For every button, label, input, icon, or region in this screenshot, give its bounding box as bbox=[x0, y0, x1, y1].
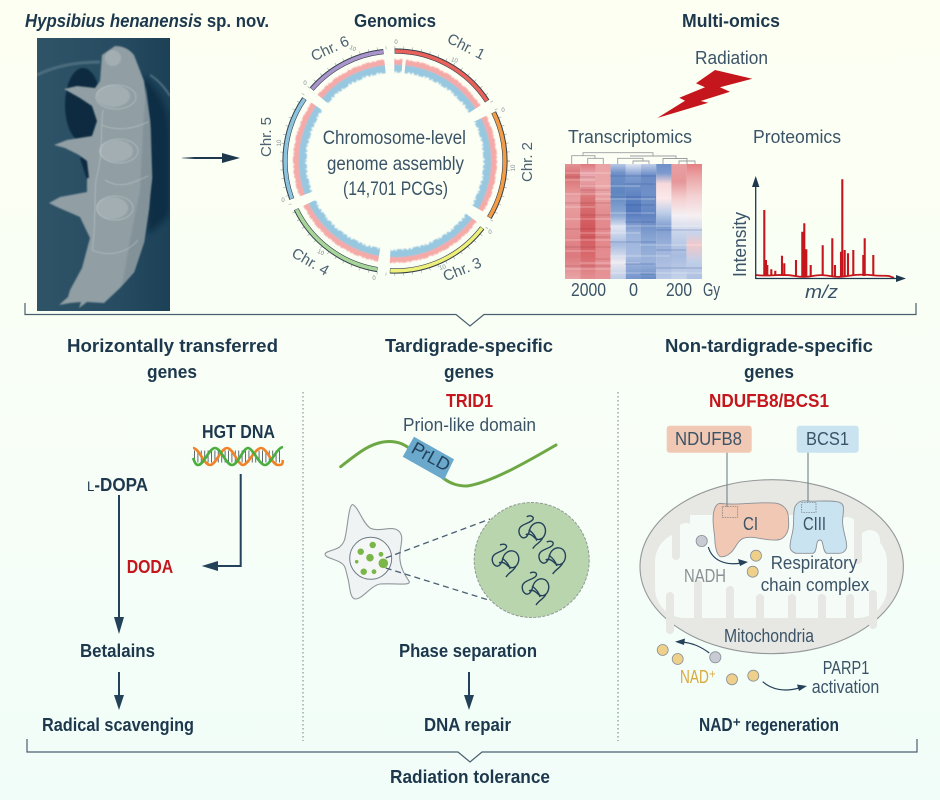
labels: chromosomes: 0 bbox=[281, 198, 285, 204]
label: PARP1 activation: activation bbox=[812, 677, 879, 697]
diagram: protein with PrLD: PrLD bbox=[408, 438, 454, 475]
callout: BCS1 bbox=[797, 426, 859, 453]
label: NAD+: NAD⁺ bbox=[680, 667, 716, 687]
heading: tardigrade-specific genes: Tardigrade-specific bbox=[385, 336, 553, 356]
icon: cell with condensates bbox=[325, 504, 409, 599]
labels: dose axis bbox=[571, 280, 720, 300]
labels: chromosomes: 0 bbox=[488, 230, 492, 236]
label: NAD+ regeneration: NAD⁺ regeneration bbox=[699, 715, 839, 735]
diagram: mitochondrion bbox=[640, 480, 903, 654]
labels: chromosomes: 10 bbox=[277, 139, 283, 146]
heading: multi-omics: Multi-omics bbox=[682, 11, 780, 31]
arrow: photo to genome bbox=[182, 153, 240, 163]
label: transcriptomics: Transcriptomics bbox=[568, 127, 692, 147]
text: chromosome-level genome assembly: (14,701 PCGs) bbox=[343, 179, 448, 200]
label: HGT DNA: HGT DNA bbox=[202, 422, 275, 442]
label: DODA: DODA bbox=[127, 557, 173, 577]
labels: chromosomes: Chr. 6 bbox=[308, 33, 352, 65]
label: TRID1: TRID1 bbox=[446, 391, 493, 411]
arrow: betalains to radical scavenging bbox=[114, 672, 124, 710]
bracket: top bbox=[25, 303, 916, 326]
heading: non-tardigrade-specific genes: Non-tardigrade-specific bbox=[665, 336, 873, 356]
labels: chromosomes: 10 bbox=[511, 164, 517, 171]
heading: tardigrade-specific genes bbox=[385, 336, 553, 382]
chart: expression heat map bbox=[565, 164, 702, 279]
label: phase separation: Phase separation bbox=[399, 641, 537, 661]
label: proteomics: Proteomics bbox=[753, 127, 841, 147]
conclusion: radiation tolerance: Radiation tolerance bbox=[390, 767, 550, 787]
arrow: HGT DNA to DODA bbox=[202, 474, 241, 571]
complex III: CIII bbox=[803, 514, 826, 534]
labels: chromosomes: 10 bbox=[439, 264, 447, 272]
labels: chromosomes: Chr. 3 bbox=[441, 254, 484, 285]
label: m/z axis: m/z bbox=[805, 282, 838, 302]
label: NADH: NADH bbox=[684, 566, 726, 586]
label: respiratory chain complex: chain complex bbox=[761, 575, 869, 595]
heading: non-tardigrade-specific genes: genes bbox=[744, 362, 794, 382]
panel: genomics bbox=[260, 14, 532, 280]
labels: chromosomes: 0 bbox=[394, 40, 398, 46]
chart: circular genome tracks bbox=[294, 60, 496, 262]
chart: chromosome bars bbox=[240, 6, 550, 316]
arrow: to PARP1 activation bbox=[763, 682, 807, 691]
icon: NAD+ molecules bbox=[657, 638, 759, 685]
labels: chromosomes: Chr. 5 bbox=[258, 117, 275, 157]
label: radiation: Radiation bbox=[695, 48, 768, 68]
text: chromosome-level genome assembly: genome assembly bbox=[327, 154, 464, 175]
label: L-DOPA: L-DOPA bbox=[87, 475, 148, 495]
icon: DNA helix bbox=[193, 447, 283, 465]
callout: NDUFB8 bbox=[667, 426, 752, 453]
heading: horizontally transferred genes: Horizontally transferred bbox=[67, 336, 278, 356]
chart: dendrogram bbox=[572, 153, 695, 164]
icon: lightning bolt bbox=[657, 70, 752, 118]
lines: zoom to condensate bbox=[386, 519, 491, 601]
heading: genomics: Genomics bbox=[354, 11, 436, 31]
panel: tardigrade-specific genes bbox=[325, 336, 589, 735]
text: chromosome-level genome assembly bbox=[323, 128, 466, 200]
label: intensity axis: Intensity bbox=[730, 212, 750, 277]
label: radical scavenging: Radical scavenging bbox=[42, 715, 194, 735]
complex III bbox=[790, 501, 847, 553]
panel: non-tardigrade-specific genes bbox=[640, 336, 903, 735]
arrow: phase separation to DNA repair bbox=[464, 672, 474, 710]
label: PARP1 activation bbox=[812, 658, 879, 697]
chart: mass spectrum bbox=[752, 176, 906, 282]
diagram: protein with PrLD bbox=[341, 437, 556, 486]
label: mitochondria: Mitochondria bbox=[724, 626, 815, 646]
heading: tardigrade-specific genes: genes bbox=[444, 362, 494, 382]
labels: dose axis: 0 bbox=[629, 280, 638, 300]
labels: chromosomes: 10 bbox=[316, 249, 325, 258]
heading: non-tardigrade-specific genes bbox=[665, 336, 873, 382]
labels: dose axis: 200 bbox=[666, 280, 692, 300]
complex I bbox=[713, 503, 789, 557]
panel: multi-omics bbox=[565, 11, 906, 302]
label: respiratory chain complex: Respiratory bbox=[771, 553, 857, 573]
labels: dose axis: Gy bbox=[703, 280, 720, 300]
labels: chromosomes: 0 bbox=[303, 81, 307, 87]
labels: chromosomes: 0 bbox=[372, 276, 376, 282]
bracket: bottom bbox=[27, 739, 917, 762]
icon: NADH to NAD+ conversion bbox=[696, 535, 762, 577]
icon: condensate droplet with protein chains bbox=[474, 502, 589, 618]
labels: chromosomes: Chr. 2 bbox=[519, 142, 536, 182]
panel: horizontally transferred genes bbox=[42, 336, 283, 735]
heading: horizontally transferred genes: genes bbox=[147, 362, 197, 382]
label: betalains: Betalains bbox=[80, 641, 155, 661]
text: chromosome-level genome assembly: Chromosome-level bbox=[323, 128, 466, 149]
label: PARP1 activation: PARP1 bbox=[823, 658, 869, 678]
arrow: L-DOPA to betalains bbox=[114, 495, 124, 634]
heading: horizontally transferred genes bbox=[67, 336, 278, 382]
label: DNA repair: DNA repair bbox=[424, 715, 511, 735]
labels: chromosomes: 0 bbox=[501, 108, 505, 114]
label: respiratory chain complex bbox=[761, 553, 869, 595]
photo: tardigrade micrograph bbox=[37, 38, 170, 311]
labels: chromosomes: 10 bbox=[450, 57, 459, 65]
label: prion-like domain: Prion-like domain bbox=[403, 415, 536, 435]
label: NDUFB8/BCS1: NDUFB8/BCS1 bbox=[709, 391, 829, 411]
dividers bbox=[303, 392, 618, 741]
labels: chromosomes: Chr. 1 bbox=[444, 30, 488, 64]
heading: species name: Hypsibius henanensis sp. nov. bbox=[25, 11, 269, 31]
labels: dose axis: 2000 bbox=[571, 280, 606, 300]
labels: chromosomes bbox=[258, 30, 536, 285]
callout: NDUFB8: NDUFB8 bbox=[675, 429, 742, 449]
labels: chromosomes: 10 bbox=[348, 45, 357, 54]
labels: chromosomes: Chr. 4 bbox=[289, 245, 332, 279]
complex I: CI bbox=[743, 514, 758, 534]
callout: BCS1: BCS1 bbox=[806, 429, 849, 449]
connector lines bbox=[727, 453, 808, 507]
